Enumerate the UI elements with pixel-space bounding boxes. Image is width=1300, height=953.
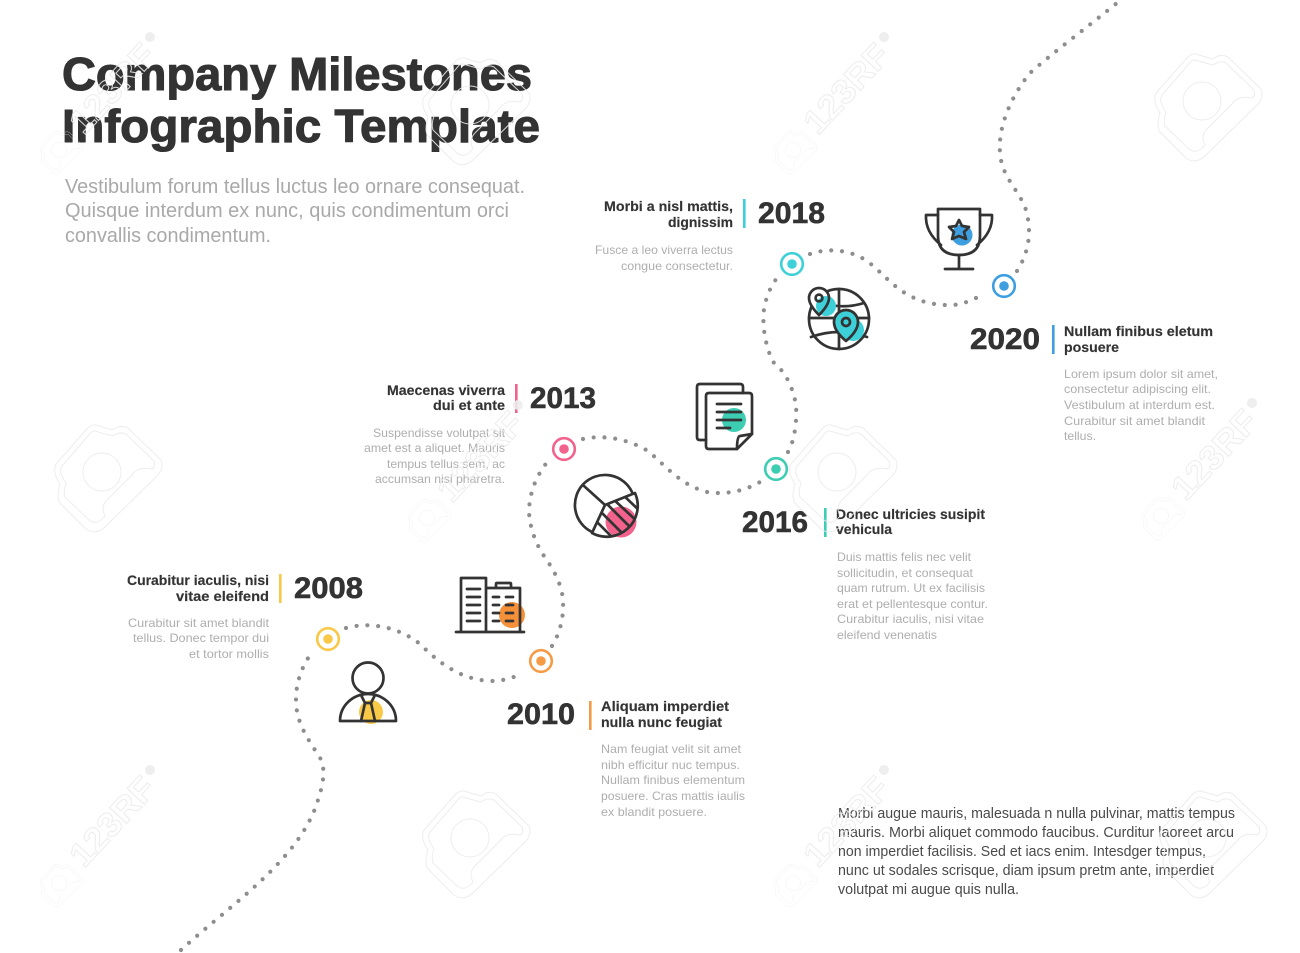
description 2013: accumsan nisi pharetra. xyxy=(375,472,505,486)
watermark: 123RF xyxy=(62,770,164,874)
accent bar 2008 xyxy=(279,574,282,603)
description 2008: et tortor mollis xyxy=(189,647,269,661)
subtitle text: Vestibulum forum tellus luctus leo ornare consequat. xyxy=(65,176,525,198)
description 2013: amet est a aliquet. Mauris xyxy=(364,441,505,455)
heading 2016: Donec ultricies susipit xyxy=(836,506,985,522)
heading 2016 xyxy=(836,506,985,537)
description 2010: Nam feugiat velit sit amet xyxy=(601,742,742,756)
dotted timeline path xyxy=(181,3,1117,950)
description 2016: sollicitudin, et consequat xyxy=(837,566,974,580)
heading 2020 xyxy=(1064,323,1213,355)
description 2020: consectetur adipiscing elit. xyxy=(1064,382,1211,396)
title: Company Milestones xyxy=(62,48,532,100)
description 2016: Curabitur iaculis, nisi vitae xyxy=(837,612,984,626)
node 2013 xyxy=(553,438,575,460)
icon: office buildings xyxy=(456,578,525,632)
closing paragraph: non imperdiet facilisis. Sed et iacs enim. Intesdger tempus, xyxy=(838,843,1206,860)
year 2008: 2008 xyxy=(294,572,363,605)
heading 2013: Maecenas viverra xyxy=(387,382,505,398)
description 2010: Nullam finibus elementum xyxy=(601,773,745,787)
description 2018: Fusce a leo viverra lectus xyxy=(595,243,733,257)
heading 2020: Nullam finibus eletum xyxy=(1064,323,1213,339)
description 2008 xyxy=(128,616,270,661)
description 2020: Curabitur sit amet blandit xyxy=(1064,414,1206,428)
closing paragraph: mauris. Morbi aliquet commodo faucibus. Curditur laoreet arcu xyxy=(838,824,1234,841)
node 2010 xyxy=(530,650,552,672)
milestone 2008 xyxy=(127,572,396,724)
description 2018: congue consectetur. xyxy=(621,259,733,273)
heading 2020: posuere xyxy=(1064,339,1119,355)
closing paragraph: volutpat mi augue quis nulla. xyxy=(838,881,1019,898)
milestone 2010 xyxy=(456,578,745,819)
node 2008 xyxy=(317,628,339,650)
description 2008: tellus. Donec tempor dui xyxy=(133,631,269,645)
title xyxy=(62,48,540,152)
description 2020: Vestibulum at interdum est. xyxy=(1064,398,1215,412)
heading 2010 xyxy=(601,698,729,730)
icon: businessman xyxy=(340,662,396,724)
watermark: 123RF xyxy=(62,37,164,141)
description 2016: eleifend venenatis xyxy=(837,628,937,642)
description 2018 xyxy=(595,243,733,273)
heading 2013: dui et ante xyxy=(433,397,505,413)
description 2010: nibh efficitur nuc tempus. xyxy=(601,758,740,772)
description 2020: Lorem ipsum dolor sit amet, xyxy=(1064,367,1218,381)
description 2016: quam rutrum. Ut ex facilisis xyxy=(837,581,985,595)
heading 2018: Morbi a nisl mattis, xyxy=(604,198,733,214)
subtitle text: Quisque interdum ex nunc, quis condimentum orci xyxy=(65,200,509,222)
icon: documents xyxy=(697,384,752,449)
year 2020: 2020 xyxy=(970,323,1040,356)
icon: trophy xyxy=(926,209,992,269)
heading 2018 xyxy=(604,198,733,230)
heading 2018: dignissim xyxy=(668,214,733,230)
closing paragraph: Morbi augue mauris, malesuada n nulla pulvinar, mattis tempus xyxy=(838,805,1235,822)
watermark: 123RF xyxy=(1164,403,1266,507)
milestone 2016 xyxy=(697,384,988,642)
heading 2016: vehicula xyxy=(836,521,892,537)
description 2013: tempus tellus sem, ac xyxy=(387,457,505,471)
heading 2010: nulla nunc feugiat xyxy=(601,714,722,730)
subtitle text: convallis condimentum. xyxy=(65,225,271,247)
accent bar 2013 xyxy=(515,384,518,413)
heading 2008: Curabitur iaculis, nisi xyxy=(127,572,269,588)
description 2016: Duis mattis felis nec velit xyxy=(837,550,972,564)
milestone 2020 xyxy=(926,209,1218,443)
description 2020 xyxy=(1064,367,1218,443)
description 2008: Curabitur sit amet blandit xyxy=(128,616,270,630)
title: Infographic Template xyxy=(62,100,540,152)
closing paragraph: nunc ut sodales scrisque, diam ipsum pretm ante, imperdiet xyxy=(838,862,1215,879)
heading 2008 xyxy=(127,572,269,604)
milestone 2013 xyxy=(364,382,645,540)
year 2018: 2018 xyxy=(758,197,825,230)
watermark: 123RF xyxy=(796,770,898,874)
node 2018 xyxy=(781,253,803,275)
description 2016: erat et pellentesque contur. xyxy=(837,597,988,611)
node 2016 xyxy=(765,458,787,480)
watermark: 123RF xyxy=(430,405,532,509)
description 2020: tellus. xyxy=(1064,429,1096,443)
description 2010: posuere. Cras mattis iaulis xyxy=(601,789,745,803)
description 2013: Suspendisse volutpat sit xyxy=(373,426,506,440)
heading 2013 xyxy=(387,382,505,413)
accent bar 2018 xyxy=(743,199,746,228)
milestone 2018 xyxy=(595,197,869,349)
node 2020 xyxy=(993,275,1015,297)
heading 2010: Aliquam imperdiet xyxy=(601,698,729,714)
heading 2008: vitae eleifend xyxy=(176,588,269,604)
year 2013: 2013 xyxy=(530,382,596,415)
description 2013 xyxy=(364,426,506,486)
description 2010: ex blandit posuere. xyxy=(601,805,707,819)
icon: pie chart xyxy=(575,475,645,540)
description 2010 xyxy=(601,742,745,819)
accent bar 2010 xyxy=(589,701,592,730)
closing paragraph xyxy=(838,805,1235,898)
year 2010: 2010 xyxy=(507,698,575,731)
accent bar 2020 xyxy=(1052,325,1055,354)
accent bar 2016 xyxy=(824,508,827,537)
subtitle text xyxy=(65,176,525,247)
icon: globe with pins xyxy=(809,288,869,349)
watermark: 123RF xyxy=(796,37,898,141)
year 2016: 2016 xyxy=(742,506,808,539)
description 2016 xyxy=(837,550,988,642)
